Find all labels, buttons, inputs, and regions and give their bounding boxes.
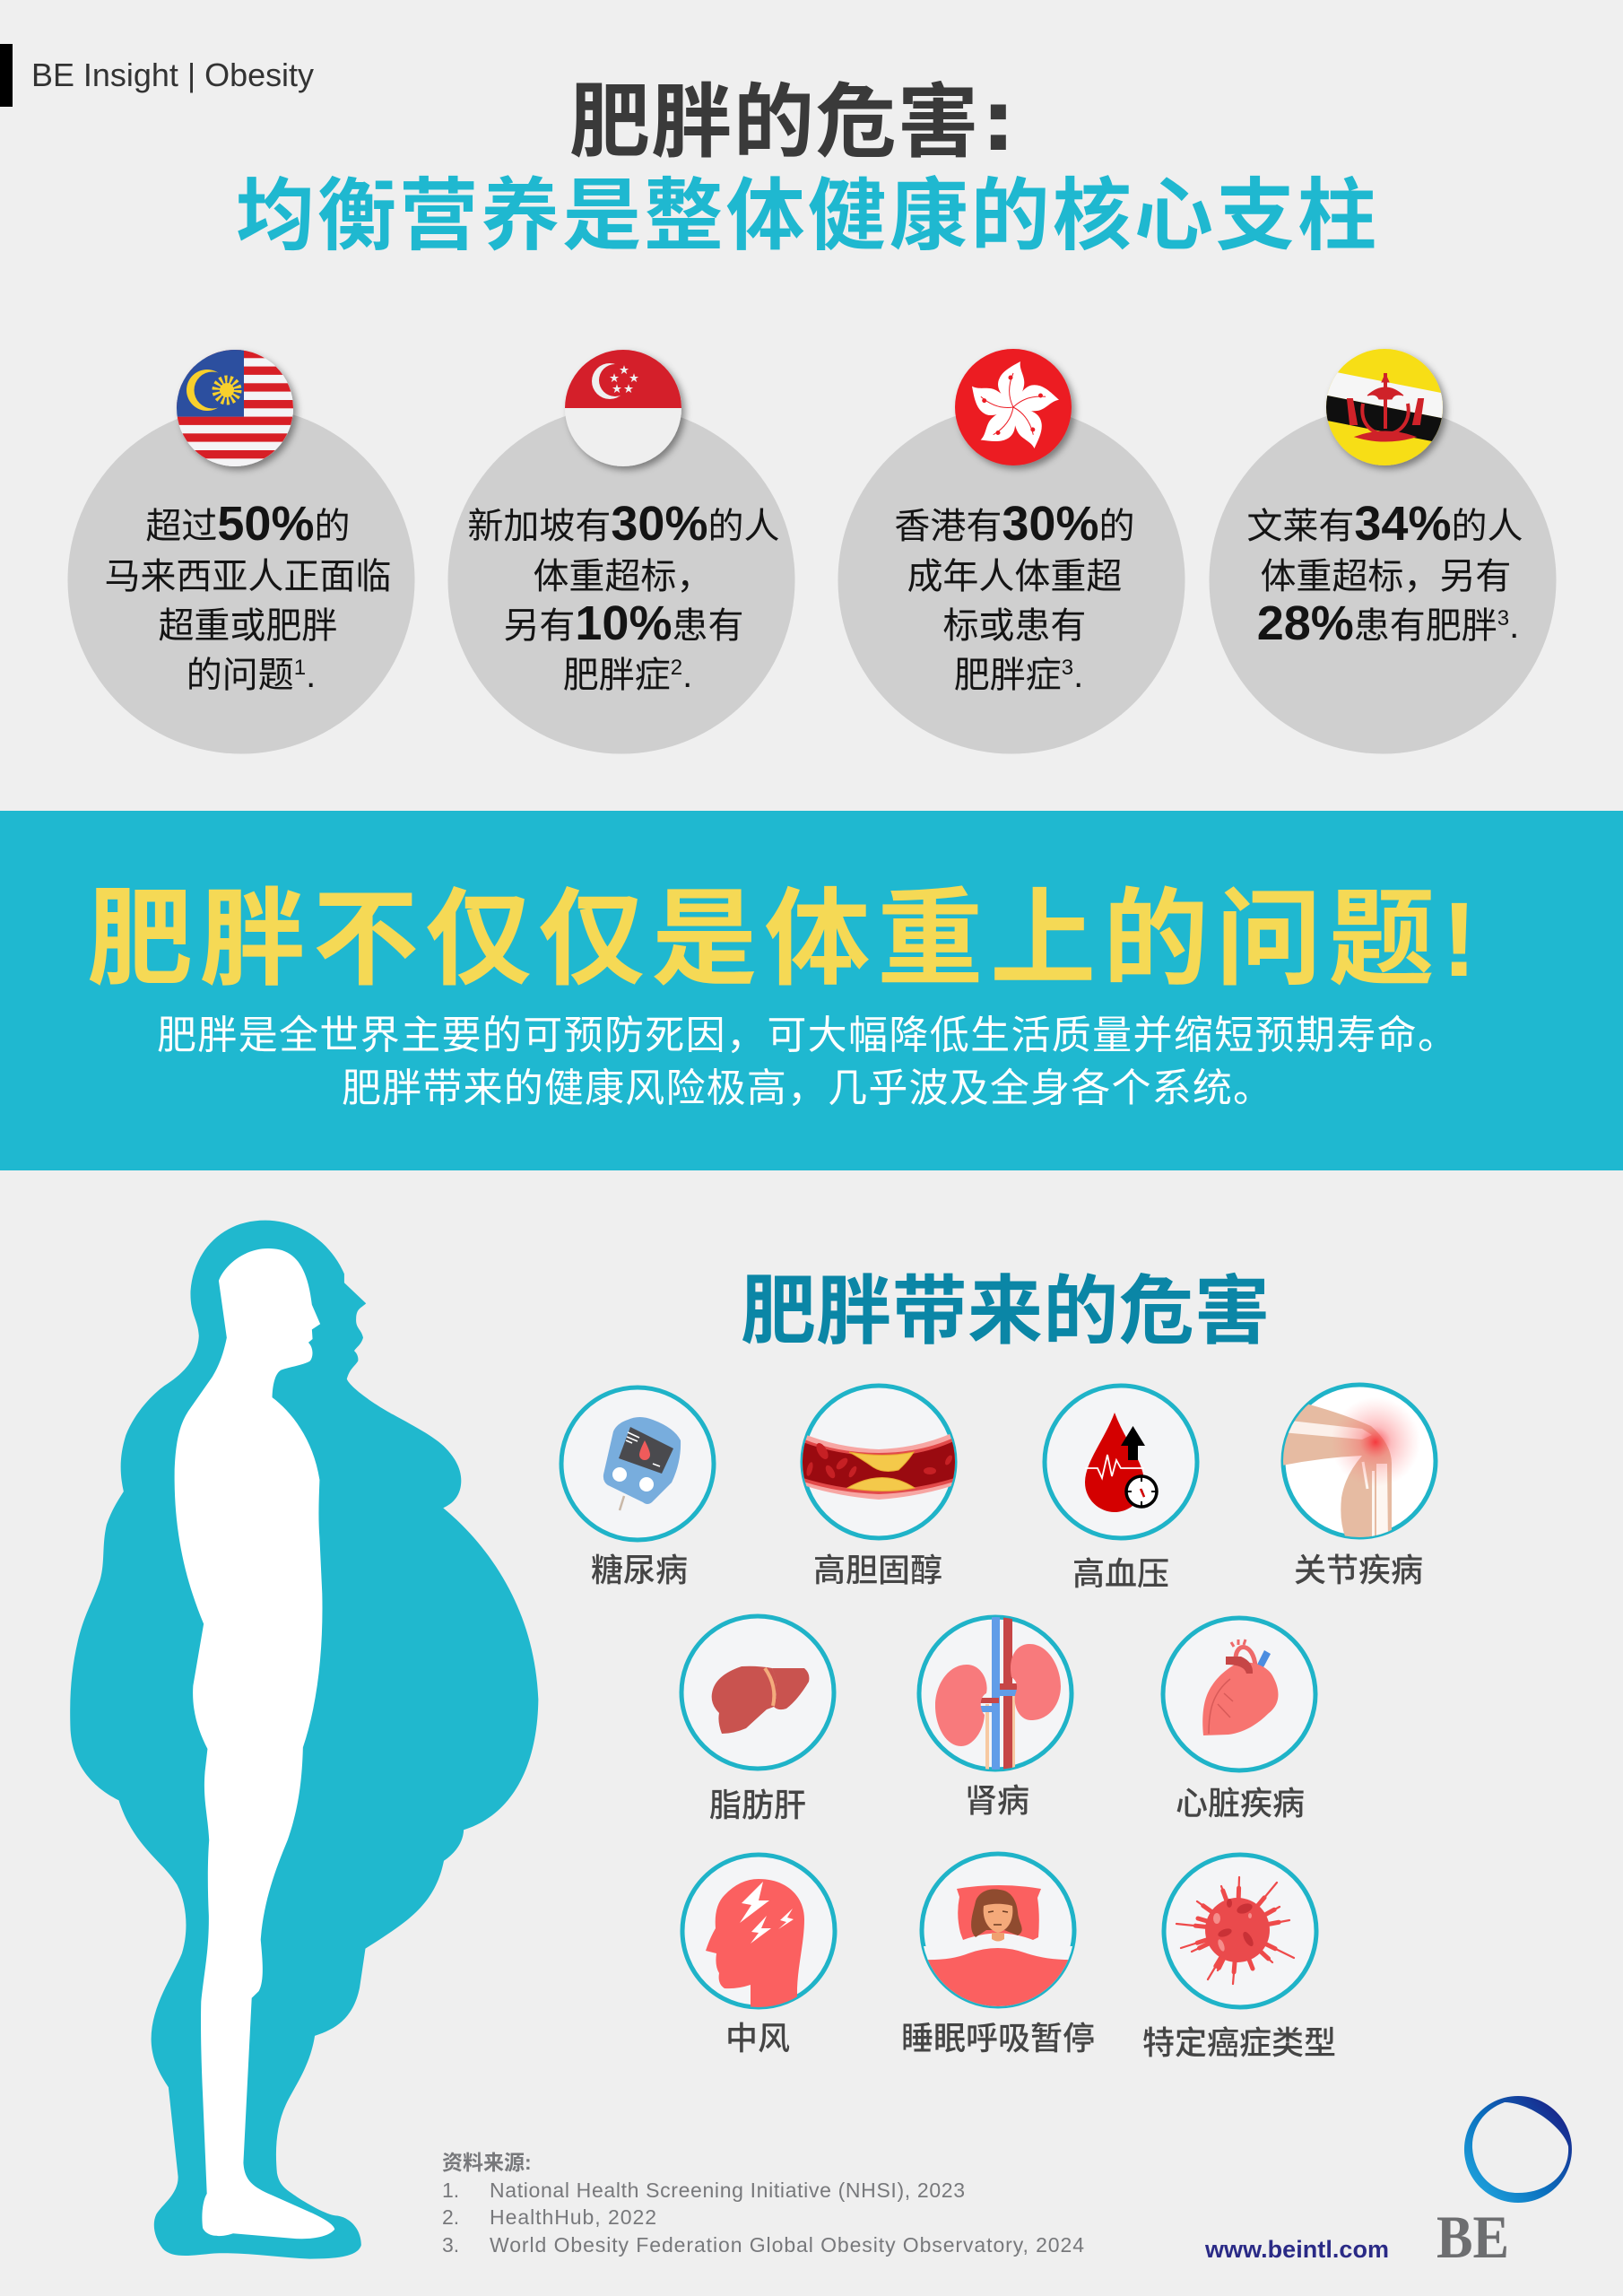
text: Brunei: 28%	[1257, 596, 1354, 650]
item: high blood pressure	[1045, 1386, 1197, 1592]
item: sleep apnea	[901, 1854, 1095, 2057]
item: diabetes	[561, 1387, 714, 1588]
text: Malaysia: 超重或肥胖	[158, 606, 337, 646]
icon: clogged artery	[803, 1434, 955, 1500]
icon: Brunei flag	[1323, 349, 1445, 465]
title: :	[985, 74, 1012, 166]
text: Hong Kong: 的	[1098, 507, 1134, 546]
panel: teal banner	[0, 811, 1623, 1170]
tag: BE Insight | Obesity	[0, 44, 314, 107]
sources: HealthHub, 2022	[490, 2205, 656, 2229]
banner text: 肥胖是全世界主要的可预防死因，可大幅降低生活质量并缩短预期寿命。	[157, 1013, 1457, 1057]
text: Malaysia: 50%	[217, 497, 314, 551]
label: 肾病	[965, 1782, 1029, 1819]
panel: Brunei statistic	[1209, 349, 1557, 753]
figure: obese body silhouette with lean body inside	[70, 1221, 538, 2259]
icon: kidneys	[935, 1614, 1061, 1776]
item: high cholesterol	[798, 1386, 959, 1588]
logo: BE: BE	[1436, 2203, 1509, 2271]
label: 关节疾病	[1294, 1552, 1423, 1588]
text: Brunei: 文莱有	[1246, 507, 1354, 546]
text: Hong Kong: 3	[1062, 656, 1073, 680]
heading: harms of obesity: 肥胖带来的危害	[741, 1269, 1270, 1353]
sources: 1.	[442, 2179, 459, 2202]
logo: BE	[1436, 2096, 1572, 2271]
tag: BE Insight | Obesity: BE Insight | Obesity	[31, 57, 314, 93]
text: Hong Kong: 肥胖症	[954, 656, 1083, 695]
icon: glucose meter	[603, 1417, 681, 1510]
title: 均衡营养是整体健康的核心支柱	[236, 171, 1376, 260]
text: Brunei: 3	[1497, 606, 1509, 631]
sources: National Health Screening Initiative (NHSI), 2023	[490, 2179, 965, 2202]
panel: Malaysia statistic	[68, 350, 414, 753]
label: 糖尿病	[591, 1552, 688, 1588]
text: Malaysia: .	[306, 656, 316, 695]
title	[236, 74, 1376, 260]
icon: Singapore flag: ★	[619, 365, 629, 376]
website: www.beintl.com	[1204, 2236, 1389, 2263]
icon: Singapore flag: ★	[612, 384, 622, 395]
sources	[442, 2151, 1084, 2257]
item: kidney disease	[919, 1614, 1072, 1819]
label: 高胆固醇	[813, 1552, 942, 1588]
text: Hong Kong: 标或患有	[942, 606, 1086, 646]
text: Singapore: 另有	[503, 596, 743, 650]
text: Malaysia: 1	[294, 656, 306, 680]
text: Hong Kong: 香港有	[894, 507, 1002, 546]
text: Brunei: 的人	[1451, 507, 1523, 546]
label: 心脏疾病	[1176, 1785, 1305, 1822]
sources: 3.	[442, 2233, 459, 2257]
text: Singapore: 10%	[575, 596, 672, 650]
item: heart disease	[1163, 1618, 1315, 1822]
icon: knee	[1283, 1403, 1415, 1537]
icon: blood drop with arrow and gauge	[1085, 1413, 1157, 1512]
icon: head with lightning	[706, 1879, 804, 2013]
text: Malaysia: 马来西亚人正面临	[104, 557, 391, 596]
item: fatty liver	[681, 1616, 834, 1823]
text: Singapore: .	[682, 656, 692, 695]
text: Malaysia: 的问题	[187, 656, 316, 695]
text: Malaysia: 超过	[145, 507, 217, 546]
text: Singapore: 30%	[611, 497, 707, 551]
icon: Singapore flag	[560, 348, 686, 466]
text: Singapore: 体重超标，	[533, 557, 712, 596]
label: 中风	[725, 2020, 790, 2057]
icon: Singapore flag: ★	[610, 373, 619, 384]
panel: Singapore statistic	[448, 348, 794, 753]
text: Singapore: 患有	[672, 606, 743, 646]
banner text: 肥胖带来的健康风险极高，几乎波及全身各个系统。	[342, 1066, 1272, 1110]
text: Singapore: 2	[671, 656, 682, 680]
text: Malaysia: 的	[314, 507, 350, 546]
item: stroke	[682, 1855, 835, 2057]
text: Brunei: 体重超标，另有	[1260, 557, 1511, 596]
banner text	[157, 1013, 1457, 1110]
icon: heart	[1202, 1639, 1278, 1735]
text: Brunei: 患有肥胖	[1354, 606, 1497, 646]
banner headline: 肥胖不仅仅是体重上的问题!	[87, 881, 1477, 999]
text: Brunei: 34%	[1354, 497, 1451, 551]
title: 肥胖的危害	[569, 78, 978, 168]
text: Brunei: .	[1509, 606, 1519, 646]
text: Hong Kong: 30%	[1002, 497, 1098, 551]
icon: Hong Kong flag	[955, 349, 1072, 465]
sources: 资料来源:	[442, 2151, 532, 2174]
label: 脂肪肝	[709, 1787, 806, 1823]
label: 特定癌症类型	[1142, 2024, 1336, 2061]
label: 高血压	[1072, 1555, 1169, 1592]
label: 睡眠呼吸暂停	[901, 2020, 1095, 2057]
text: Singapore: 肥胖症	[563, 656, 692, 695]
panel: Hong Kong statistic	[838, 349, 1185, 753]
item: certain cancers	[1142, 1855, 1336, 2061]
icon: person in bed	[924, 1885, 1072, 2006]
text: Singapore: 的人	[707, 507, 779, 546]
sources: World Obesity Federation Global Obesity Observatory, 2024	[490, 2233, 1084, 2257]
text: Hong Kong: .	[1073, 656, 1083, 695]
item: joint disease	[1282, 1385, 1436, 1588]
sources: 2.	[442, 2205, 459, 2229]
icon: Singapore flag: ★	[624, 384, 633, 395]
icon: liver	[712, 1666, 809, 1734]
icon: cancer cell	[1176, 1877, 1294, 1984]
text: Singapore: 新加坡有	[467, 507, 611, 546]
icon: Malaysia flag	[170, 350, 305, 467]
text: Hong Kong: 成年人体重超	[907, 557, 1122, 596]
icon: Singapore flag: ★	[629, 373, 638, 384]
